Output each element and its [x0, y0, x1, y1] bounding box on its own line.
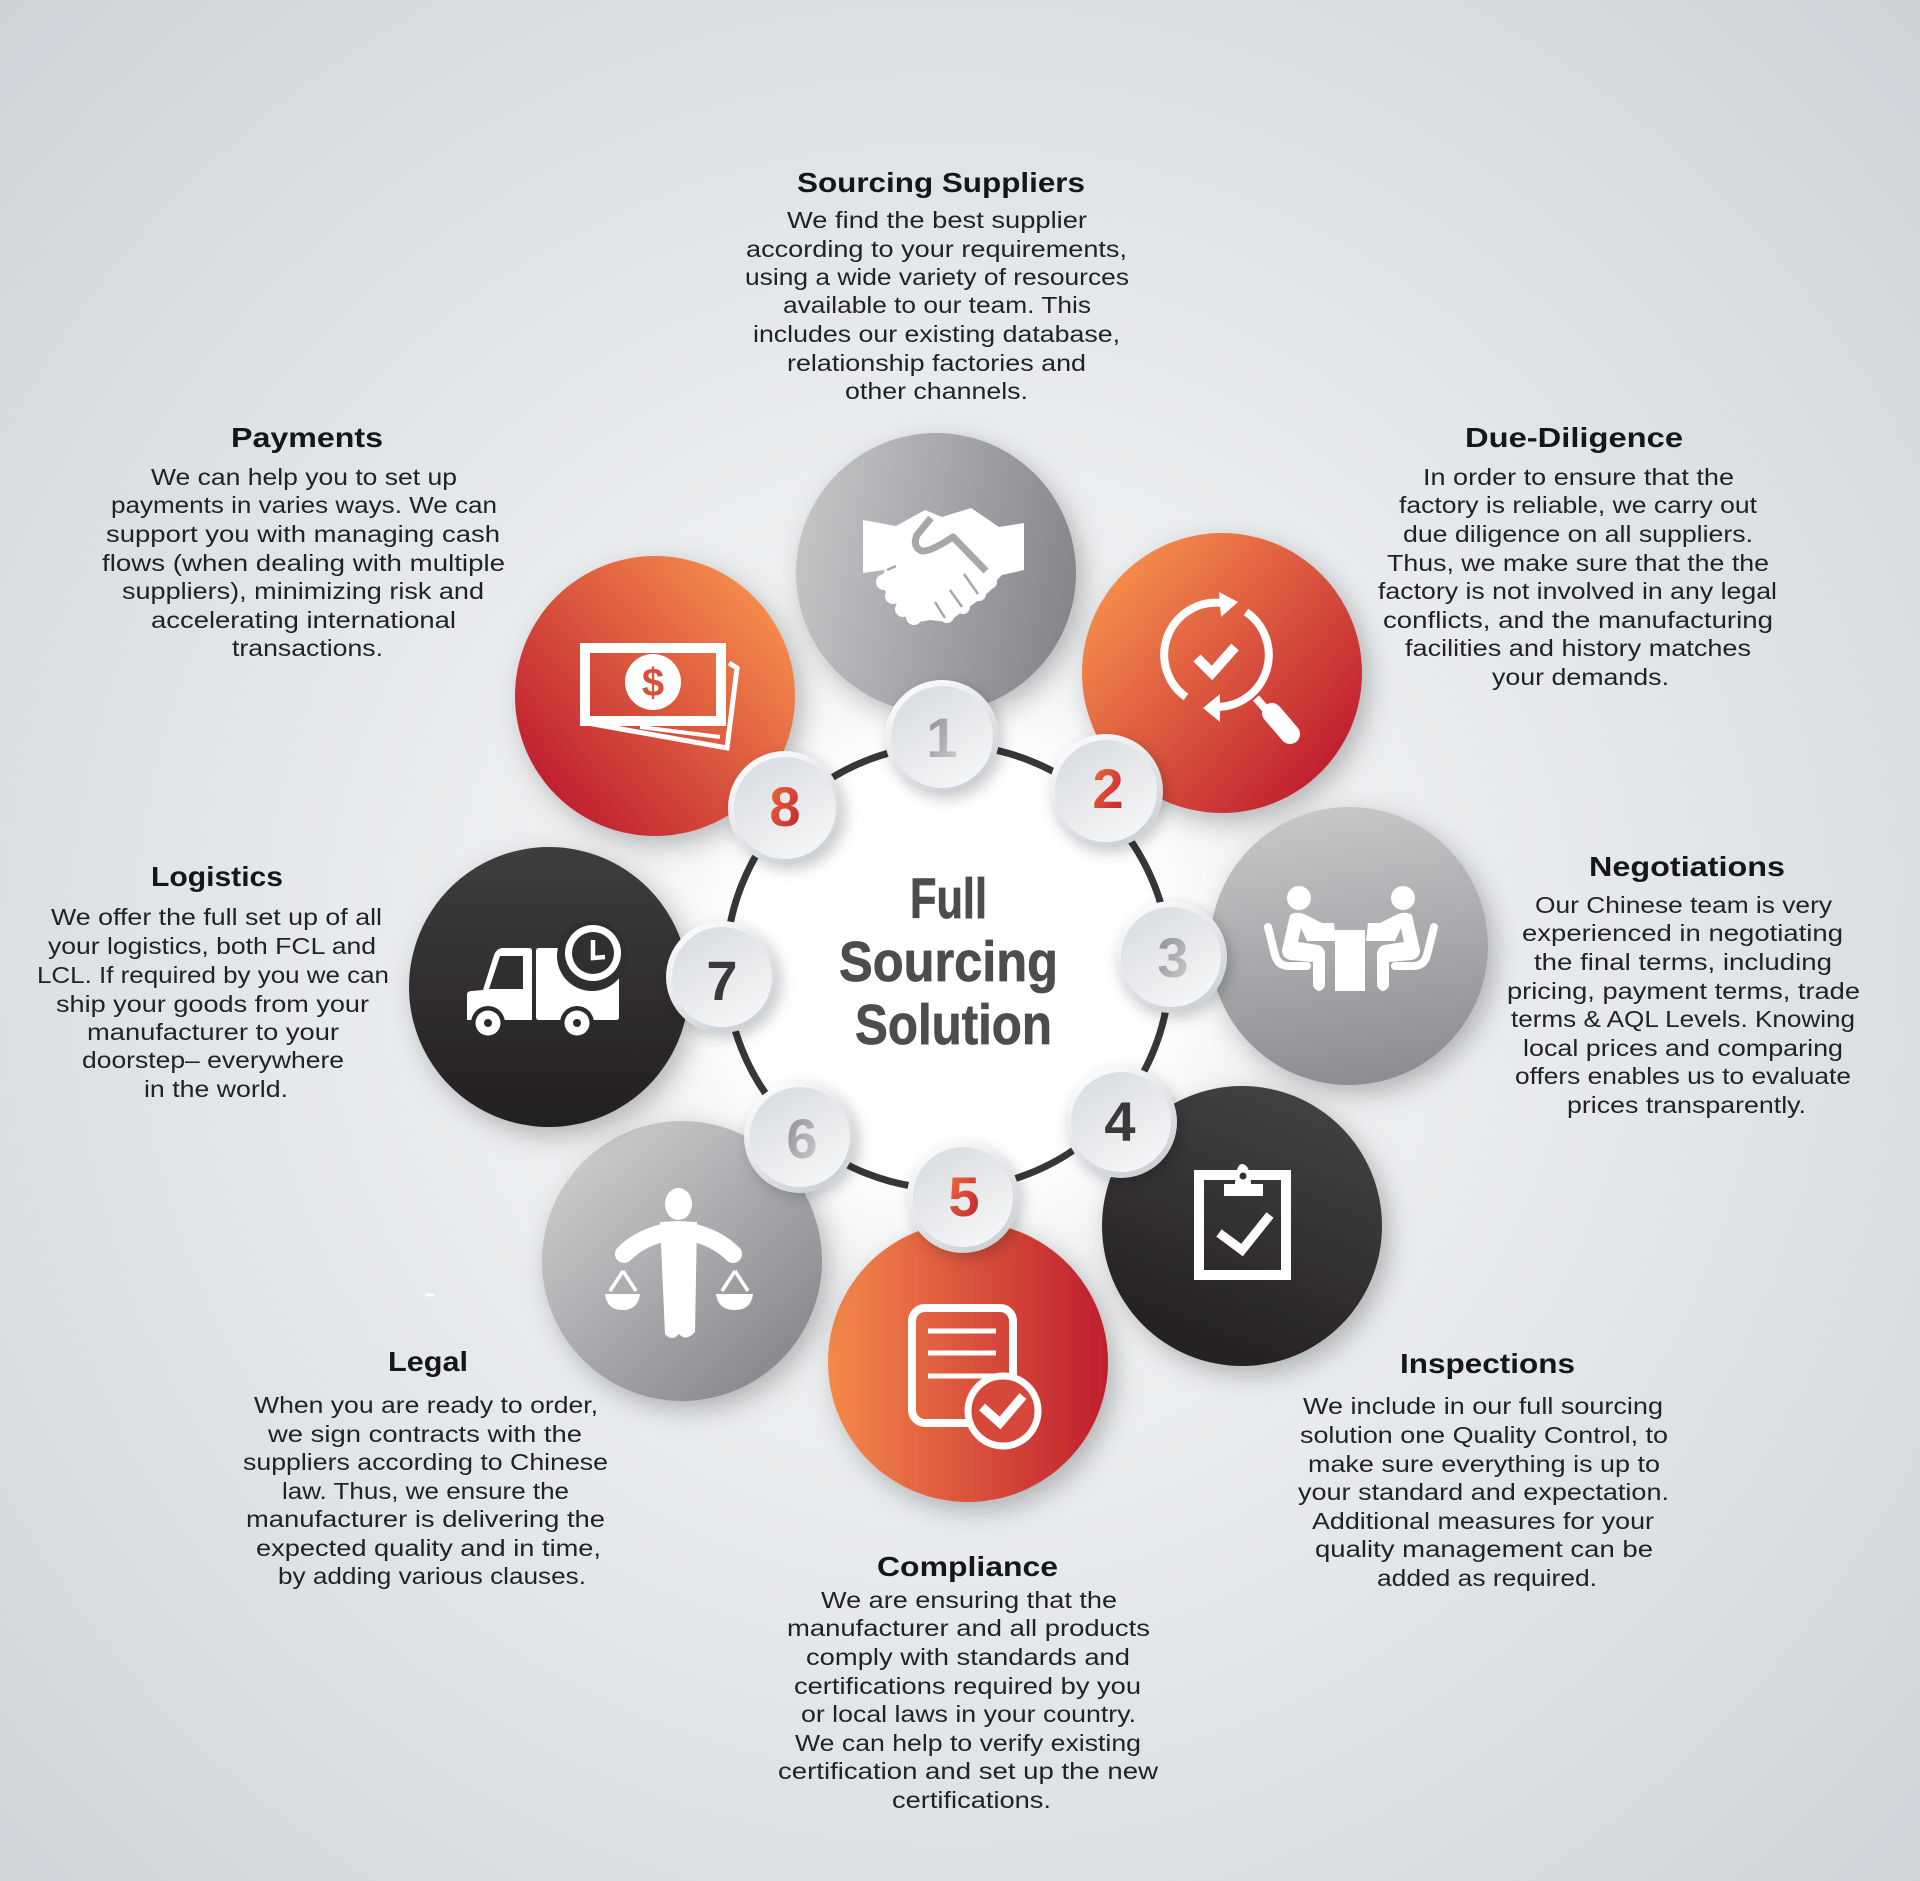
- text block: compliance: [778, 1551, 1158, 1813]
- body: compliance: certifications required by you: [794, 1673, 1141, 1699]
- body: compliance: comply with standards and: [806, 1644, 1130, 1670]
- body: logistics: in the world.: [144, 1076, 288, 1102]
- body: compliance: manufacturer and all products: [787, 1615, 1150, 1641]
- body: sourcing suppliers: using a wide variety of resources: [745, 264, 1129, 290]
- body: payments: We can help you to set up: [151, 464, 457, 490]
- body: logistics: [37, 904, 389, 1102]
- body: inspections: your standard and expectation.: [1298, 1479, 1669, 1505]
- body: inspections: added as required.: [1377, 1565, 1597, 1591]
- body: logistics: We offer the full set up of all: [51, 904, 382, 930]
- number badge 6: 6: [786, 1107, 818, 1170]
- icon: banknotes with dollar sign: [582, 648, 737, 748]
- number badge 4: [1065, 1066, 1177, 1178]
- body: legal: expected quality and in time,: [256, 1535, 601, 1561]
- body: logistics: doorstep– everywhere: [82, 1047, 344, 1073]
- icon: handshake: [863, 508, 1024, 625]
- body: legal: [243, 1392, 608, 1589]
- text block: negotiations: [1507, 851, 1860, 1118]
- heading: inspections: Inspections: [1400, 1348, 1575, 1379]
- body: payments: flows (when dealing with multiple: [102, 550, 505, 576]
- body: due diligence: conflicts, and the manufacturing: [1383, 607, 1773, 633]
- body: sourcing suppliers: We find the best supplier: [787, 207, 1087, 233]
- body: payments: [102, 464, 505, 661]
- heading: compliance: Compliance: [877, 1551, 1058, 1582]
- number badge 7: [666, 921, 778, 1033]
- icon: delivery truck with clock: [467, 921, 627, 1040]
- center title: Full: [910, 867, 987, 931]
- text block: inspections: [1298, 1348, 1669, 1591]
- body: compliance: We can help to verify existing: [795, 1730, 1141, 1756]
- text block: legal: [243, 1346, 608, 1589]
- body: due diligence: [1378, 464, 1777, 690]
- body: negotiations: experienced in negotiating: [1522, 920, 1843, 946]
- body: inspections: solution one Quality Control, to: [1300, 1422, 1668, 1448]
- number badge 1: 1: [926, 706, 958, 769]
- body: due diligence: Thus, we make sure that the the: [1387, 550, 1769, 576]
- number badge 8: [728, 751, 842, 865]
- body: negotiations: terms & AQL Levels. Knowing: [1511, 1006, 1855, 1032]
- body: compliance: certification and set up the new: [778, 1758, 1158, 1784]
- heading: sourcing suppliers: Sourcing Suppliers: [797, 167, 1085, 198]
- circle: negotiations: [1210, 807, 1488, 1085]
- circle: payments: [515, 556, 795, 836]
- body: legal: manufacturer is delivering the: [246, 1506, 605, 1532]
- number badge 3: [1115, 901, 1227, 1013]
- number badge 7: 7: [706, 949, 738, 1012]
- number badge 3: 3: [1157, 926, 1189, 989]
- text block: logistics: [37, 861, 389, 1102]
- heading: negotiations: Negotiations: [1589, 851, 1785, 882]
- body: compliance: or local laws in your country.: [801, 1701, 1136, 1727]
- number badge 4: 4: [1104, 1090, 1136, 1153]
- heading: legal: Legal: [388, 1346, 468, 1377]
- body: payments: accelerating international: [151, 607, 456, 633]
- body: due diligence: your demands.: [1492, 664, 1669, 690]
- body: legal: When you are ready to order,: [254, 1392, 598, 1418]
- body: logistics: LCL. If required by you we can: [37, 962, 389, 988]
- body: negotiations: prices transparently.: [1567, 1092, 1806, 1118]
- body: payments: transactions.: [232, 635, 383, 661]
- body: payments: suppliers), minimizing risk and: [122, 578, 484, 604]
- central white glow: [618, 637, 1278, 1297]
- body: inspections: We include in our full sourcing: [1303, 1393, 1663, 1419]
- circle: compliance: [828, 1222, 1108, 1502]
- text block: due diligence: [1378, 422, 1777, 690]
- number badge 6: [744, 1081, 856, 1193]
- text block: payments: [102, 422, 505, 661]
- icon: document with check: [912, 1308, 1038, 1446]
- circle: sourcing suppliers: [796, 433, 1076, 713]
- ring connecting the steps: [726, 745, 1170, 1189]
- body: negotiations: Our Chinese team is very: [1535, 892, 1833, 918]
- body: negotiations: the final terms, including: [1534, 949, 1832, 975]
- text block: sourcing suppliers: [745, 167, 1129, 404]
- body: sourcing suppliers: other channels.: [845, 378, 1028, 404]
- body: due diligence: due diligence on all suppliers.: [1403, 521, 1753, 547]
- body: negotiations: offers enables us to evaluate: [1515, 1063, 1851, 1089]
- body: legal: law. Thus, we ensure the: [282, 1478, 569, 1504]
- body: logistics: manufacturer to your: [87, 1019, 339, 1045]
- heading: payments: Payments: [231, 422, 383, 453]
- number badge 8: 8: [769, 775, 801, 838]
- circle: due diligence: [1082, 533, 1362, 813]
- heading: due diligence: Due-Diligence: [1465, 422, 1683, 453]
- body: logistics: ship your goods from your: [56, 991, 369, 1017]
- body: inspections: make sure everything is up to: [1308, 1451, 1660, 1477]
- body: due diligence: facilities and history matches: [1405, 635, 1751, 661]
- number badge 5: 5: [948, 1165, 980, 1228]
- heading: logistics: Logistics: [151, 861, 283, 892]
- icon: clipboard with check: [1199, 1164, 1286, 1275]
- body: compliance: [778, 1587, 1158, 1813]
- icon: two people at a table: [1268, 886, 1434, 991]
- number badge 2: 2: [1092, 757, 1124, 820]
- center title: Solution: [855, 993, 1052, 1057]
- number badge 5: [907, 1141, 1019, 1253]
- body: due diligence: In order to ensure that the: [1423, 464, 1734, 490]
- circle: inspections: [1102, 1086, 1382, 1366]
- body: due diligence: factory is reliable, we carry out: [1399, 492, 1758, 518]
- number badge 1: [885, 680, 999, 794]
- circle: logistics: [409, 847, 689, 1127]
- small white speck: [425, 1294, 435, 1296]
- body: inspections: Additional measures for your: [1312, 1508, 1654, 1534]
- body: sourcing suppliers: according to your requirements,: [746, 236, 1127, 262]
- body: sourcing suppliers: includes our existing database,: [753, 321, 1120, 347]
- body: payments: payments in varies ways. We can: [111, 492, 497, 518]
- number badge 2: [1049, 734, 1163, 848]
- body: negotiations: pricing, payment terms, trade: [1507, 978, 1860, 1004]
- body: inspections: quality management can be: [1315, 1536, 1653, 1562]
- body: compliance: certifications.: [892, 1787, 1051, 1813]
- body: sourcing suppliers: relationship factories and: [787, 350, 1086, 376]
- body: sourcing suppliers: available to our team. This: [783, 292, 1091, 318]
- body: due diligence: factory is not involved in any legal: [1378, 578, 1777, 604]
- icon: businessman holding scales: [605, 1188, 753, 1338]
- icon: magnifier with check: [1164, 592, 1290, 734]
- body: payments: support you with managing cash: [106, 521, 500, 547]
- body: sourcing suppliers: [745, 207, 1129, 404]
- body: inspections: [1298, 1393, 1669, 1591]
- center title: Sourcing: [839, 930, 1058, 994]
- circle: legal: [542, 1121, 822, 1401]
- center title: [839, 867, 1058, 1057]
- icon: banknotes with dollar sign: $: [642, 661, 664, 705]
- body: negotiations: [1507, 892, 1860, 1118]
- body: logistics: your logistics, both FCL and: [48, 933, 376, 959]
- body: legal: we sign contracts with the: [267, 1421, 582, 1447]
- body: compliance: We are ensuring that the: [821, 1587, 1117, 1613]
- body: legal: by adding various clauses.: [278, 1563, 586, 1589]
- body: negotiations: local prices and comparing: [1523, 1035, 1843, 1061]
- body: legal: suppliers according to Chinese: [243, 1449, 608, 1475]
